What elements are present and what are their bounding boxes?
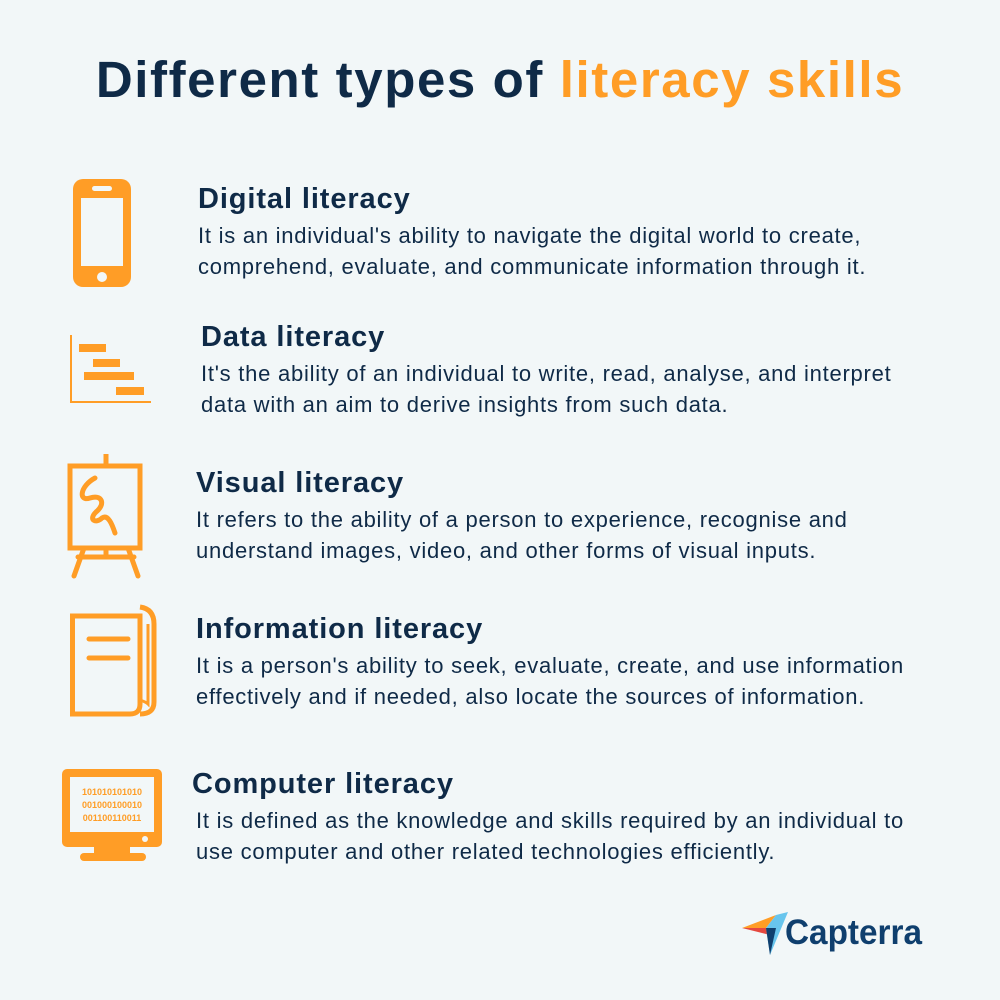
- section: computer: Computer literacy: [192, 768, 454, 800]
- section: digital: It is an individual's ability to navigate the digital world to create,: [198, 223, 861, 248]
- section: data: Data literacy: [201, 321, 385, 353]
- section: computer: It is defined as the knowledge and skills required by an individual to: [196, 808, 904, 833]
- icon: book: [70, 604, 156, 716]
- section: visual: understand images, video, and other forms of visual inputs.: [196, 538, 816, 563]
- section: visual: [196, 467, 848, 563]
- section: data: data with an aim to derive insights from such data.: [201, 392, 728, 417]
- logo: Capterra: Capterra: [785, 913, 923, 952]
- logo: Capterra: [742, 912, 923, 955]
- icon: easel: [68, 454, 142, 578]
- section: computer: [192, 768, 904, 864]
- title: Different types of literacy skills: [96, 51, 904, 108]
- section: visual: It refers to the ability of a person to experience, recognise and: [196, 507, 848, 532]
- section: information: It is a person's ability to seek, evaluate, create, and use information: [196, 653, 904, 678]
- section: digital: [198, 183, 866, 279]
- icon: computer: [62, 769, 162, 861]
- section: computer: use computer and other related technologies efficiently.: [196, 839, 775, 864]
- icon: computer: 101010101010: [82, 787, 142, 797]
- section: data: [201, 321, 891, 417]
- section: information: effectively and if needed, also locate the sources of information.: [196, 684, 865, 709]
- section: information: [196, 613, 904, 709]
- section: visual: Visual literacy: [196, 467, 404, 499]
- icon: computer: 001000100010: [82, 800, 142, 810]
- section: information: Information literacy: [196, 613, 483, 645]
- icon: computer: 001100110011: [83, 813, 141, 823]
- section: digital: comprehend, evaluate, and communicate information through it.: [198, 254, 866, 279]
- icon: phone: [73, 179, 131, 287]
- section: digital: Digital literacy: [198, 183, 411, 215]
- section: data: It's the ability of an individual to write, read, analyse, and interpret: [201, 361, 891, 386]
- icon: data chart: [70, 335, 151, 403]
